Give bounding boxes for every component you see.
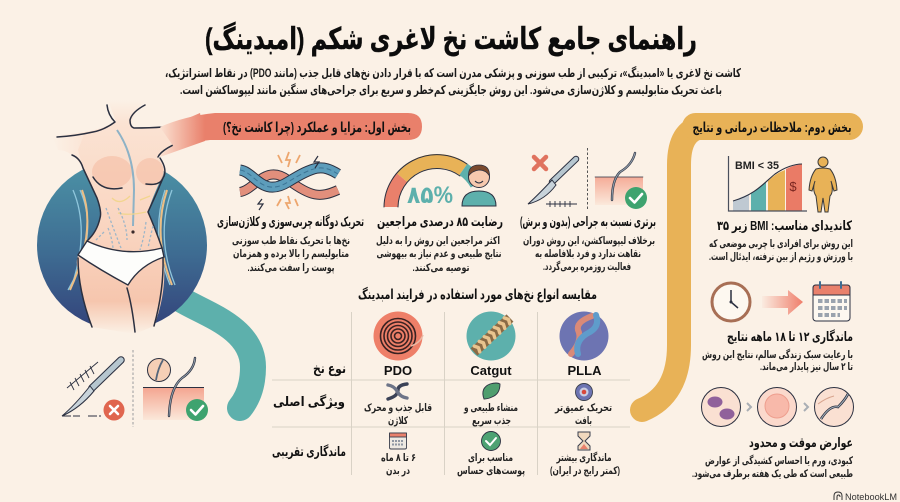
icon: PLLA braid <box>560 312 608 360</box>
icon: scalpel versus thread <box>528 148 647 210</box>
body text: اکثر مراجعین این روش را به دلیل <box>376 235 500 247</box>
column: Catgut: منشاء طبیعی و <box>463 402 518 414</box>
icon: bruise <box>702 388 740 426</box>
column: PDO: در بدن <box>386 465 410 477</box>
body text <box>702 348 853 373</box>
body text: فعالیت روزمره برمی‌گردد. <box>543 260 631 273</box>
arrow <box>762 290 803 315</box>
column: PLLA <box>550 312 620 477</box>
row labels: ویژگی اصلی <box>273 394 345 409</box>
icon: scalpel with sutures and X <box>62 360 124 420</box>
heading: برتری نسبت به جراحی (بدون و برش) <box>520 214 656 229</box>
section one header: بخش اول: مزایا و عملکرد (چرا کاشت نخ؟) <box>223 119 411 136</box>
heading: کاندیدای مناسب: BMI زیر ۳۵ <box>717 218 852 233</box>
divider dashed <box>132 350 134 427</box>
body text <box>709 238 853 263</box>
NotebookLM mark: NotebookLM <box>845 492 897 502</box>
icon: check <box>482 432 500 450</box>
heading: رضایت ۸۵ درصدی مراجعین <box>377 214 503 229</box>
title: راهنمای جامع کاشت نخ لاغری شکم (امبدینگ) <box>205 21 697 57</box>
icon: clock <box>712 283 750 321</box>
icon: swelling <box>758 388 796 426</box>
chevrons <box>747 403 808 411</box>
body text: تا ۲ سال نیز پایدار می‌ماند. <box>760 361 853 373</box>
body text <box>232 235 350 274</box>
body text <box>376 235 502 274</box>
chart: BMI curve <box>728 156 807 211</box>
body text: برخلاف لیپوساکشن، این روش دوران <box>523 235 655 247</box>
body text: پوست را سفت می‌کنند. <box>248 262 335 274</box>
body text: نقاهت ندارد و فرد بلافاصله به <box>535 248 641 260</box>
column: PLLA: PLLA <box>568 363 602 378</box>
panel: durability of results <box>702 282 853 373</box>
body text: توصیه می‌کنند. <box>412 262 470 274</box>
icon: tension thread <box>814 388 854 426</box>
heading: تحریک دوگانه چربی‌سوزی و کلاژن‌سازی <box>217 214 364 229</box>
icon: person silhouette <box>809 157 837 212</box>
column: Catgut: Catgut <box>470 363 512 378</box>
icon: leaf <box>483 383 500 399</box>
chart: BMI curve: $ <box>789 179 797 194</box>
icon: twisted ropes <box>240 152 338 210</box>
column: PLLA: (کمتر رایج در ایران) <box>550 465 620 477</box>
teal connector band <box>182 300 253 408</box>
body text <box>523 235 655 273</box>
table title: مقایسه انواع نخ‌های مورد استفاده در فرایند امبدینگ <box>358 286 597 302</box>
column: PDO: کلاژن <box>388 415 409 427</box>
heading: عوارض موقت و محدود <box>749 435 853 450</box>
body text: نخ‌ها با تحریک نقاط طب سوزنی <box>232 235 350 247</box>
column: PLLA: ماندگاری بیشتر <box>556 451 612 464</box>
column: PDO: PDO <box>384 363 412 378</box>
column: PDO <box>364 312 432 477</box>
body text: نتایج طبیعی و عدم نیاز به بیهوشی <box>376 248 502 260</box>
column: PDO: قابل جذب و محرک <box>364 402 432 414</box>
section two header and gold band <box>642 113 863 410</box>
illustration: body figure on circle <box>37 100 207 334</box>
row labels <box>272 361 346 459</box>
body text <box>692 454 854 480</box>
column: PLLA: بافت <box>575 415 592 427</box>
column: PLLA: تحریک عمیق‌تر <box>554 402 612 414</box>
panel: advantage over surgery <box>520 148 656 273</box>
comparison table <box>272 286 630 477</box>
body text: متابولیسم را بالا برده و همزمان <box>233 248 349 260</box>
icon: gauge with person: ۸۵% <box>407 182 453 209</box>
intro text <box>165 66 741 98</box>
icon: target <box>576 384 592 400</box>
column: Catgut: پوست‌های حساس <box>457 465 525 477</box>
icon: PDO spiral <box>374 312 423 360</box>
panel: 85 percent satisfaction <box>376 155 503 274</box>
column: Catgut: جذب سریع <box>472 415 511 427</box>
panel: side effects <box>692 388 854 480</box>
column: Catgut <box>457 312 525 477</box>
row labels: نوع نخ <box>313 361 346 376</box>
panel: dual stimulation <box>217 152 364 274</box>
chart: BMI curve: BMI < 35 <box>735 160 779 172</box>
icon: thread in skin with check <box>143 358 208 421</box>
icon: calendar <box>813 282 850 321</box>
icon: DNA <box>388 384 407 399</box>
panel: BMI candidate <box>709 156 853 263</box>
heading: ماندگاری ۱۲ تا ۱۸ ماهه نتایج <box>727 329 853 344</box>
section one header <box>160 113 422 150</box>
icon: Catgut braid <box>466 312 516 360</box>
icon: calendar small <box>390 433 406 449</box>
column: Catgut: مناسب برای <box>468 452 513 464</box>
icon: hourglass <box>578 432 590 450</box>
row labels: ماندگاری تقریبی <box>272 444 346 459</box>
column: PDO: ۶ تا ۸ ماه <box>381 452 416 464</box>
